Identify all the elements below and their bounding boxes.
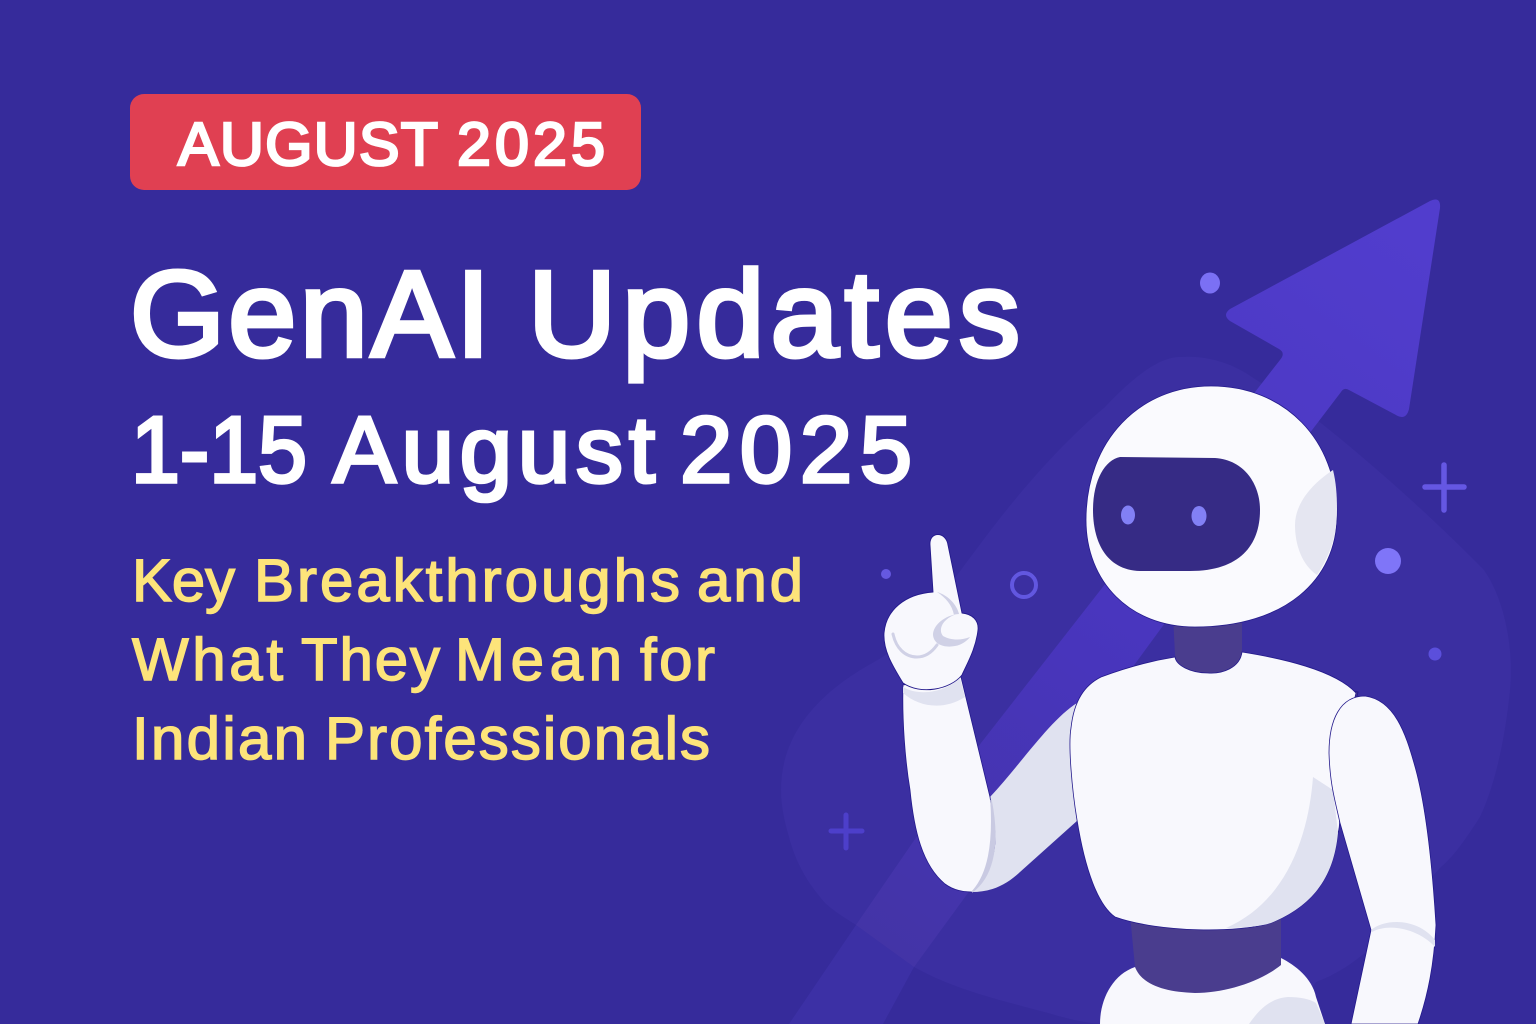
- tagline: What: [132, 626, 283, 693]
- tagline: Indian: [132, 705, 307, 772]
- decoration: dots, ring and plus signs: [831, 272, 1464, 848]
- robot palm line: [893, 634, 937, 657]
- robot wrist cuff shade: [903, 678, 965, 706]
- title: [130, 246, 1020, 382]
- growth arrow: [856, 200, 1440, 967]
- robot torso shading: [1226, 777, 1338, 928]
- robot neck: [1173, 615, 1242, 673]
- tagline: Mean: [455, 626, 622, 693]
- robot illustration: [884, 386, 1436, 1024]
- robot head side shade: [1295, 470, 1337, 575]
- title: Updates: [528, 246, 1020, 382]
- robot upper arm (rear shaded): [972, 703, 1078, 892]
- robot right shoulder joint: [1314, 691, 1358, 792]
- robot eyes: [1121, 506, 1206, 526]
- faded arrow tail: [789, 925, 914, 1024]
- robot forearm edge shade: [972, 800, 995, 892]
- robot hand: [884, 534, 978, 690]
- robot hips: [1100, 958, 1325, 1024]
- tagline: They: [301, 626, 440, 693]
- background blob: [781, 357, 1511, 1024]
- tagline: Breakthroughs: [254, 547, 680, 614]
- subtitle: date range: August: [333, 397, 655, 502]
- tagline: Professionals: [325, 705, 710, 772]
- badge: date tag: 2025: [457, 110, 605, 178]
- robot finger creases: [933, 592, 970, 647]
- robot waist band: [1130, 915, 1281, 993]
- badge: date tag: AUGUST: [178, 110, 438, 178]
- title: GenAI: [130, 246, 490, 382]
- robot visor: [1093, 457, 1260, 571]
- tagline: and: [697, 547, 803, 614]
- badge: date tag: [130, 94, 641, 190]
- robot elbow joint shade: [1371, 922, 1435, 947]
- subtitle: date range: [131, 397, 912, 502]
- subtitle: date range: 2025: [680, 397, 912, 502]
- tagline: Key: [132, 547, 235, 614]
- robot forearm: [903, 677, 995, 892]
- robot hip shading: [1249, 997, 1325, 1024]
- robot head: [1086, 386, 1337, 627]
- robot right arm: [1329, 696, 1436, 1024]
- tagline: for: [640, 626, 715, 693]
- tagline: [132, 547, 803, 772]
- subtitle: date range: 1-15: [131, 397, 307, 502]
- robot torso: [1070, 652, 1356, 930]
